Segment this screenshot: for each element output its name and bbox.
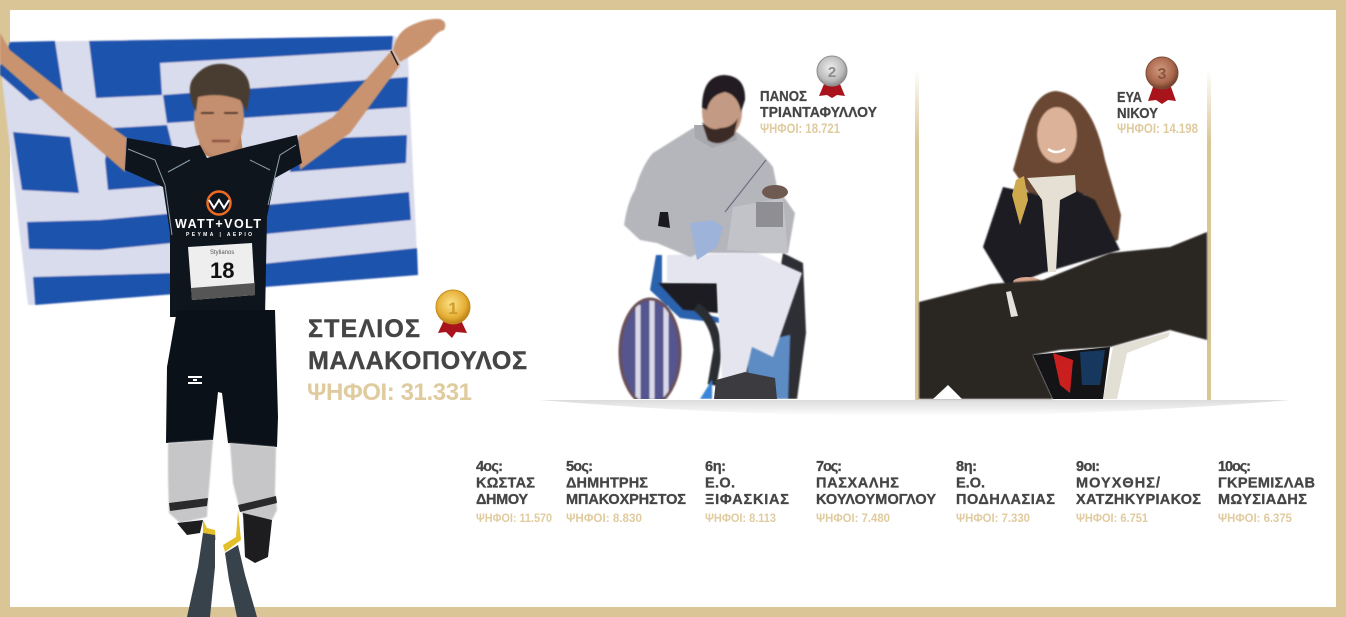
5th place: 5ος: bbox=[566, 459, 593, 475]
neck bbox=[199, 130, 243, 162]
bronze medal: 3 bbox=[1158, 66, 1167, 83]
chair dark base bbox=[1033, 347, 1110, 399]
10th place: 10ος: bbox=[1218, 459, 1251, 475]
smile bbox=[1048, 149, 1065, 152]
hand on mask bbox=[762, 185, 788, 199]
third place athlete with fencing bag bbox=[919, 91, 1207, 399]
4th place: ΔΗΜΟΥ bbox=[476, 492, 528, 508]
4th place bbox=[476, 459, 552, 525]
silver medal: 2 bbox=[828, 64, 836, 81]
second place text bbox=[760, 88, 877, 136]
sleeve bands bbox=[169, 496, 277, 512]
gold divider right bbox=[1207, 70, 1211, 400]
white floor patch bbox=[933, 385, 962, 399]
6th place: Ε.Ο. bbox=[705, 476, 735, 492]
7th place: 7ος: bbox=[816, 459, 842, 475]
chair red panel bbox=[1053, 353, 1073, 393]
head bbox=[190, 64, 250, 156]
collar bbox=[694, 125, 737, 148]
head bbox=[702, 75, 745, 143]
black shirt bbox=[125, 135, 302, 317]
4th place: 4ος: bbox=[476, 459, 503, 475]
wheelchair bbox=[619, 253, 806, 406]
gold medal bbox=[436, 290, 470, 338]
4th place: ΚΩΣΤΑΣ bbox=[476, 476, 535, 492]
6th place bbox=[705, 459, 789, 525]
10th place: ΓΚΡΕΜΙΣΛΑΒ bbox=[1218, 476, 1315, 492]
9th place: 9οι: bbox=[1076, 459, 1100, 475]
6th place: 6η: bbox=[705, 459, 726, 475]
first place text bbox=[307, 315, 527, 406]
8th place: 8η: bbox=[956, 459, 977, 475]
race bib bbox=[188, 243, 255, 300]
8th place bbox=[956, 459, 1055, 525]
gold medal: 1 bbox=[448, 299, 458, 318]
9th place: ΧΑΤΖΗΚΥΡΙΑΚΟΣ bbox=[1076, 492, 1201, 508]
black jacket bbox=[983, 187, 1120, 287]
first place text: ΨΗΦΟΙ: 31.331 bbox=[307, 379, 472, 406]
bag strap bbox=[1006, 291, 1018, 317]
third place text: ΨΗΦΟΙ: 14.198 bbox=[1117, 120, 1198, 136]
silver medal bbox=[817, 56, 847, 98]
white trousers bbox=[667, 253, 802, 378]
third place text bbox=[1117, 89, 1198, 136]
floor shadow bbox=[540, 400, 1290, 416]
6th place: ΨΗΦΟΙ: 8.113 bbox=[705, 511, 776, 525]
face bbox=[1037, 107, 1077, 163]
shirt logo bbox=[175, 192, 261, 238]
5th place: ΨΗΦΟΙ: 8.830 bbox=[566, 511, 642, 525]
7th place: ΠΑΣΧΑΛΗΣ bbox=[816, 476, 899, 492]
mask mesh bbox=[756, 202, 783, 227]
race bib: Stylianos bbox=[210, 250, 234, 256]
yellow strap bbox=[1012, 176, 1028, 225]
5th place bbox=[566, 459, 686, 525]
second place text: ΤΡΙΑΝΤΑΦΥΛΛΟΥ bbox=[760, 104, 877, 121]
shirt logo: ΡΕΥΜΑ | ΑΕΡΙΟ bbox=[186, 232, 252, 238]
shoes bbox=[714, 372, 777, 399]
bronze medal bbox=[1146, 57, 1178, 104]
race bib: 18 bbox=[210, 258, 234, 283]
fencing mask bbox=[727, 198, 788, 253]
9th place bbox=[1076, 459, 1201, 525]
7th place: ΚΟΥΛΟΥΜΟΓΛΟΥ bbox=[816, 492, 936, 508]
first place text: ΜΑΛΑΚΟΠΟΥΛΟΣ bbox=[308, 347, 527, 375]
second place athlete in wheelchair bbox=[619, 75, 806, 406]
prosthetic sockets bbox=[177, 513, 272, 563]
glove bbox=[690, 220, 723, 260]
wristband bbox=[391, 51, 398, 65]
Greek flag bbox=[0, 36, 418, 305]
first place text: ΣΤΕΛΙΟΣ bbox=[308, 315, 420, 343]
second place text: ΨΗΦΟΙ: 18.721 bbox=[760, 120, 840, 136]
grey fencing jacket bbox=[624, 128, 795, 257]
10th place bbox=[1218, 459, 1315, 525]
long hair bbox=[1013, 91, 1121, 250]
running blades bbox=[187, 510, 257, 617]
dark fencing bag bbox=[919, 232, 1207, 399]
8th place: ΠΟΔΗΛΑΣΙΑΣ bbox=[956, 492, 1055, 508]
7th place bbox=[816, 459, 936, 525]
10th place: ΜΩΥΣΙΑΔΗΣ bbox=[1218, 492, 1307, 508]
third place text: ΝΙΚΟΥ bbox=[1117, 105, 1158, 122]
chair blue panel bbox=[1080, 350, 1105, 385]
second place text: ΠΑΝΟΣ bbox=[760, 88, 807, 105]
10th place: ΨΗΦΟΙ: 6.375 bbox=[1218, 511, 1292, 525]
5th place: ΔΗΜΗΤΡΗΣ bbox=[566, 476, 648, 492]
leg sleeves bbox=[168, 440, 277, 523]
shirt logo: WATT+VOLT bbox=[175, 217, 261, 231]
8th place: Ε.Ο. bbox=[956, 476, 985, 492]
first place athlete with Greek flag bbox=[0, 19, 445, 617]
white chair frame bbox=[1103, 332, 1170, 399]
6th place: ΞΙΦΑΣΚΙΑΣ bbox=[705, 492, 789, 508]
scarf and top bbox=[1027, 175, 1076, 272]
shorts logo bbox=[188, 377, 202, 383]
black shorts bbox=[166, 310, 278, 447]
third place text: ΕΥΑ bbox=[1117, 89, 1142, 106]
9th place: ΜΟΥΧΘΗΣ/ bbox=[1076, 476, 1160, 492]
hand bbox=[1013, 277, 1041, 287]
9th place: ΨΗΦΟΙ: 6.751 bbox=[1076, 511, 1148, 525]
7th place: ΨΗΦΟΙ: 7.480 bbox=[816, 511, 890, 525]
5th place: ΜΠΑΚΟΧΡΗΣΤΟΣ bbox=[566, 492, 686, 508]
chair gap by arm bbox=[658, 212, 670, 228]
blade bbox=[725, 160, 766, 212]
4th place: ΨΗΦΟΙ: 11.570 bbox=[476, 511, 552, 525]
8th place: ΨΗΦΟΙ: 7.330 bbox=[956, 511, 1030, 525]
raised arms bbox=[0, 19, 445, 172]
shirt seams bbox=[128, 145, 296, 235]
gold divider left bbox=[915, 70, 919, 400]
